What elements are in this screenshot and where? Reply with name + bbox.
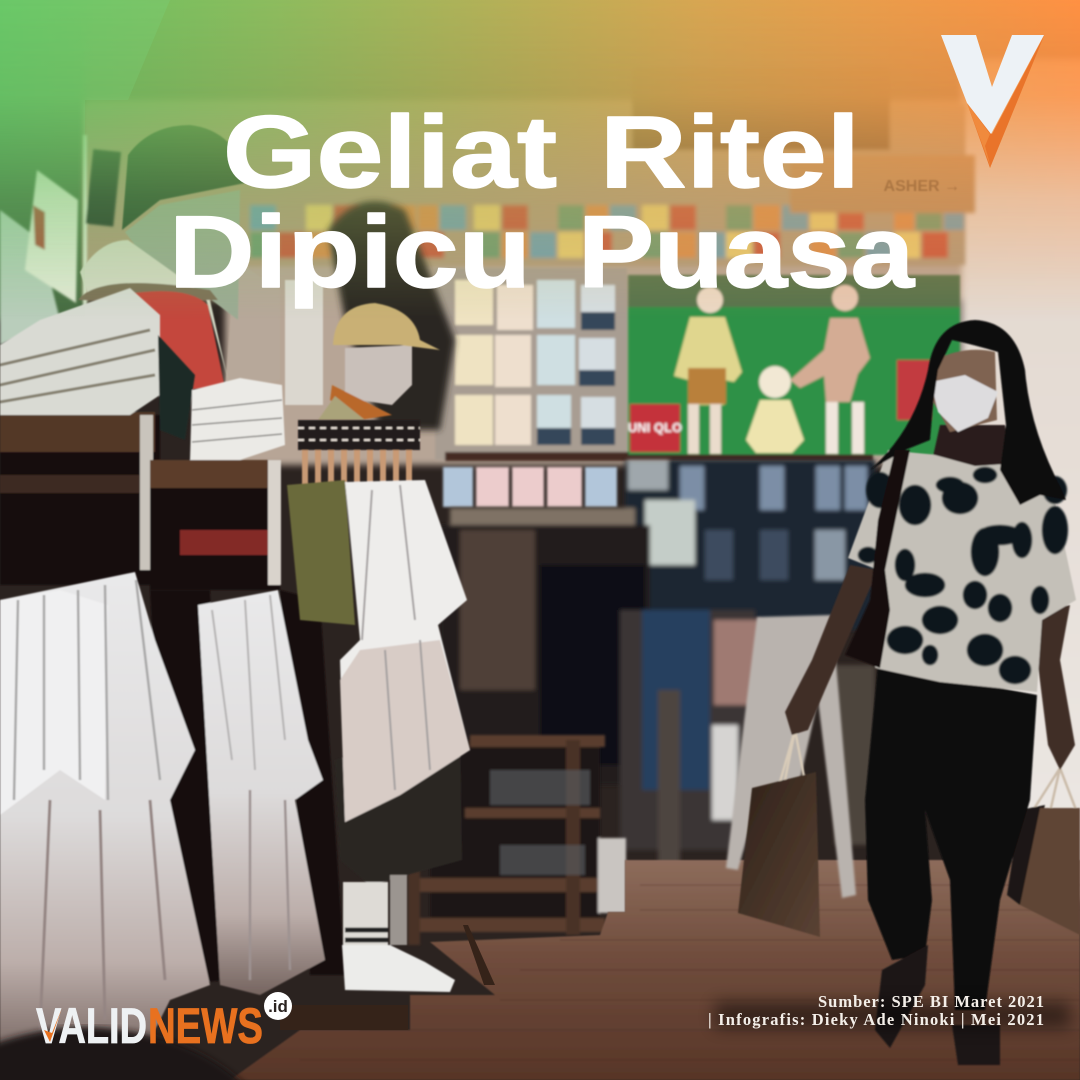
right shopping bag (1007, 768, 1080, 935)
hooded mannequin behind (328, 201, 455, 430)
wall shelves with folded shirts (435, 268, 873, 507)
a-frame sign (726, 615, 856, 898)
shoes (875, 945, 1000, 1065)
left foreground shadows (0, 1027, 250, 1080)
arms (785, 565, 1075, 770)
colourful mosaic wall (85, 68, 975, 265)
left rack: white t-shirts (0, 572, 345, 1060)
white display post (285, 280, 323, 405)
shopper (738, 320, 1080, 1065)
blouse floral print (858, 467, 1068, 684)
wooden floor (230, 860, 1080, 1080)
far-left figure with price card (0, 135, 121, 345)
validnews logo (36, 992, 292, 1054)
legs and trousers (865, 665, 1037, 1010)
neck and face (930, 425, 1010, 470)
dark back shelves (440, 460, 875, 890)
shoulder strap and handbag (845, 450, 910, 668)
source credit: | Infografis: Dieky Ade Ninoki | Mei 2021 (708, 1010, 1044, 1029)
title: Geliat (223, 95, 557, 209)
hair (870, 320, 1066, 505)
wooden display shelves (408, 735, 626, 945)
middle rack: hangers and shirts (287, 420, 470, 992)
blouse (848, 450, 1076, 692)
left rack: hangers, shelf and folded shirts (0, 288, 285, 590)
mannequin with dark cap, hoodie and red top (78, 125, 280, 390)
icon: V logo top right (941, 35, 1044, 168)
centre mannequin with olive cap (318, 303, 440, 420)
title: Ritel (600, 95, 860, 209)
green display with mannequins: UNI QLO (628, 420, 682, 435)
green display with mannequins (628, 275, 960, 455)
validnews logo: NEWS (148, 998, 263, 1054)
source credit: Sumber: SPE BI Maret 2021 (818, 992, 1044, 1011)
wall sign: ASHER → (884, 178, 960, 195)
floor streaks (300, 885, 1080, 1060)
title: Puasa (578, 195, 915, 309)
validnews logo: VALID (36, 998, 147, 1054)
display platform (280, 925, 495, 1030)
title (169, 95, 915, 309)
left shopping bag (738, 730, 820, 937)
title: Dipicu (169, 195, 531, 309)
source credit (708, 992, 1070, 1029)
validnews logo: .id (268, 997, 288, 1016)
face mask (931, 375, 998, 432)
green to orange gradient overlay (0, 0, 1080, 320)
